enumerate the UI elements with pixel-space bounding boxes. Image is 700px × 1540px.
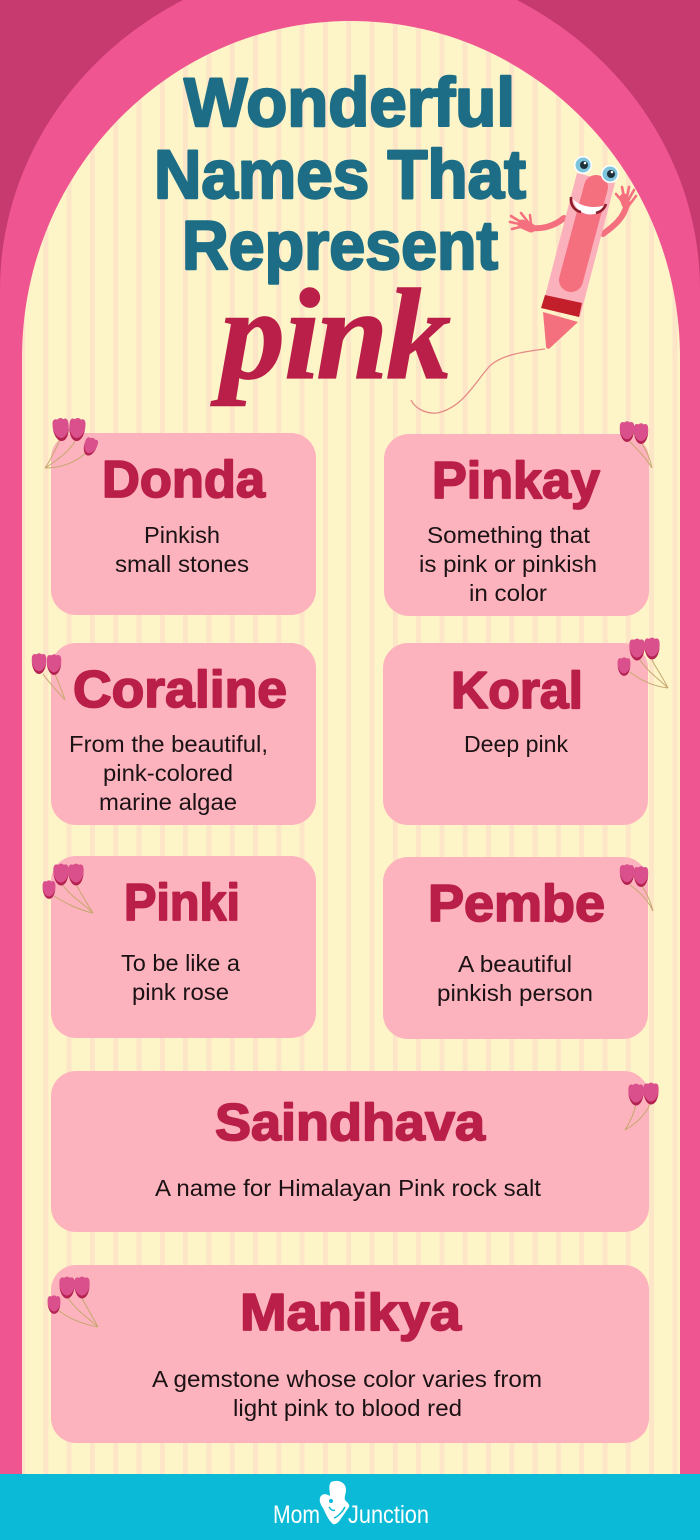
card: Coraline: Coraline [73, 661, 287, 719]
crayon inner stripe and nose [571, 187, 596, 280]
card: Pinki: Pinki [124, 874, 240, 932]
footer logo: MomJunction: Mom [273, 1501, 320, 1529]
card: Pinkay: in color [469, 580, 547, 606]
crayon band [541, 295, 582, 317]
icon: tulips on Saindhava [625, 1083, 659, 1130]
card: Pinkay: is pink or pinkish [419, 551, 597, 577]
icon: tulips on Pinkay [620, 421, 652, 468]
title [154, 64, 526, 284]
card: Pinkay: Something that [427, 522, 591, 548]
crayon body [542, 173, 615, 317]
card: Donda: small stones [115, 551, 249, 577]
title: Names That [154, 136, 526, 213]
card: Manikya [51, 1265, 649, 1443]
card: Donda [51, 433, 316, 615]
card: Coraline [51, 643, 316, 825]
card: Manikya: Manikya [240, 1284, 462, 1342]
title: Wonderful [184, 64, 515, 141]
crayon left eye [574, 156, 592, 174]
card: Coraline: pink-colored [103, 760, 233, 786]
card: Pinkay: Pinkay [432, 452, 600, 510]
crayon drawn line [411, 349, 545, 413]
crayon mouth [573, 199, 606, 214]
card: Manikya: A gemstone whose color varies from [152, 1366, 542, 1392]
icon: tulips on Koral [618, 638, 668, 688]
card: Saindhava: A name for Himalayan Pink rock salt [155, 1175, 542, 1201]
card: Saindhava [51, 1071, 649, 1232]
card: Koral: Deep pink [464, 731, 568, 757]
crayon arms [510, 187, 636, 234]
card: Pembe: Pembe [428, 875, 605, 933]
card: Saindhava: Saindhava [215, 1094, 486, 1152]
card: Koral: Koral [451, 662, 583, 720]
card: Donda: Pinkish [144, 522, 220, 548]
icon: tulips on Pembe [620, 864, 653, 911]
footer band [0, 1474, 700, 1540]
icon: tulips on Donda [45, 417, 99, 468]
crayon tip [543, 312, 578, 349]
card: Pinki: pink rose [132, 979, 229, 1005]
icon: smiling crayon character [510, 156, 636, 349]
title script word: pink: pink [210, 263, 451, 407]
card: Pembe: A beautiful [458, 951, 572, 977]
card: Pinki: To be like a [121, 950, 240, 976]
title: Represent [182, 207, 498, 284]
card: Coraline: From the beautiful, [69, 731, 268, 757]
icon: tulips on Coraline [32, 653, 65, 700]
card: Pembe [383, 857, 648, 1039]
card: Manikya: light pink to blood red [233, 1395, 462, 1421]
icon: tulips on Manikya [48, 1277, 98, 1327]
card: Donda: Donda [102, 451, 266, 509]
card: Koral [383, 643, 648, 825]
card: Coraline: marine algae [99, 789, 237, 815]
icon: tulips on Pinki [43, 864, 93, 913]
crayon right eye [601, 165, 619, 183]
footer logo: MomJunction: Junction [348, 1501, 429, 1529]
logo icon: mother and child [320, 1481, 349, 1524]
card: Pinki [51, 856, 316, 1038]
card: Pinkay [384, 434, 649, 616]
card: Pembe: pinkish person [437, 980, 593, 1006]
footer logo: MomJunction [273, 1481, 429, 1529]
